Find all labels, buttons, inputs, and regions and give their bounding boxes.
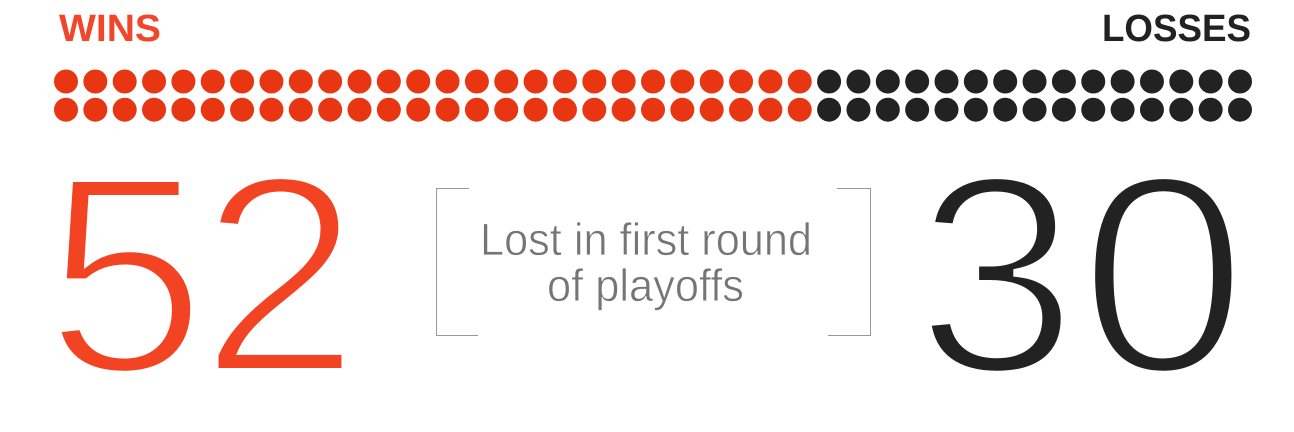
big number: losses: 0 — [1079, 117, 1247, 432]
big number: wins — [45, 117, 360, 432]
dot chart: 52 wins and 30 losses — [54, 70, 1252, 122]
big number: wins: 5 — [45, 117, 207, 432]
win dots — [54, 70, 812, 122]
caption — [480, 214, 812, 311]
right bracket — [828, 188, 870, 336]
caption: Lost in first round — [480, 214, 812, 265]
heading: wins: WINS — [59, 8, 161, 50]
loss dots — [817, 70, 1252, 122]
big number: losses — [916, 117, 1247, 432]
caption: of playoffs — [547, 260, 744, 311]
big number: wins: 2 — [200, 117, 360, 432]
big number: losses: 3 — [916, 117, 1077, 432]
heading: losses: LOSSES — [1102, 8, 1251, 50]
left bracket — [436, 188, 478, 336]
